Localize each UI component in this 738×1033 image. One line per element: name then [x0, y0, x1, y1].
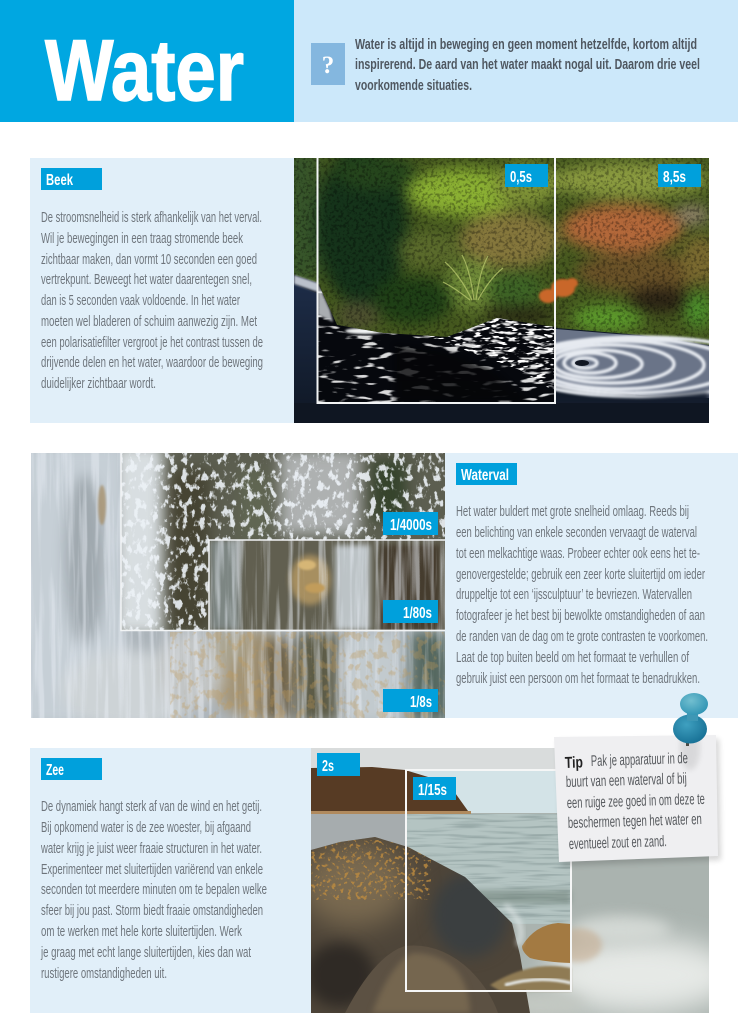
- label: 1/80s: 1/80s: [403, 605, 432, 622]
- tip text: eventueel zout en zand.: [569, 833, 667, 853]
- callout: tip note with pin: [554, 693, 721, 866]
- frame: 1/15s crop: [406, 770, 571, 991]
- frame section: 1/4000s frozen water: [115, 445, 445, 635]
- body text: Beek: moeten wel bladeren of schuim aanwezig zijn. Met: [41, 313, 258, 330]
- water: dark stream and swirl: [294, 275, 738, 423]
- photo: waterfall: [31, 453, 445, 718]
- front boulder: [345, 946, 498, 1013]
- main boulder: [311, 837, 530, 1013]
- icon: question mark: [311, 43, 345, 85]
- body text: Zee: De dynamiek hangt sterk af van de wind en het getij.: [41, 798, 262, 815]
- label: 8,5s: [658, 164, 701, 187]
- body text: Zee: rustigere omstandigheden uit.: [41, 965, 167, 982]
- label: 1/80s: [383, 600, 438, 623]
- icon: push pin: [673, 693, 708, 746]
- intro text: [355, 37, 700, 94]
- small golden rock: [570, 926, 604, 964]
- heading: Waterval: Waterval: [461, 467, 509, 484]
- hillside: [311, 767, 468, 813]
- intro text: voorkomende situaties.: [355, 78, 472, 94]
- body text: Beek: duidelijker zichtbaar wordt.: [41, 375, 156, 392]
- label: 1/8s: [383, 689, 438, 712]
- panel: Waterval text: [445, 453, 738, 718]
- photo: stream with vegetation: [294, 158, 709, 423]
- body text: Zee: om te werken met hele korte sluitertijden. Werk: [41, 923, 242, 940]
- icon: question mark: ?: [322, 52, 334, 79]
- tip text: [565, 750, 705, 853]
- label: 1/4000s: 1/4000s: [390, 517, 432, 534]
- label: 0,5s: 0,5s: [510, 169, 532, 186]
- body text: Zee: Experimenteer met sluitertijden variërend van enkele: [41, 861, 263, 878]
- heading: Beek: Beek: [46, 172, 73, 189]
- label: 1/4000s: [383, 512, 438, 535]
- header: intro panel: [294, 0, 738, 122]
- plant: orange leaves: [539, 278, 578, 303]
- body text: Beek: drijvende delen en het water, waardoor de beweging: [41, 354, 263, 371]
- label: 2s: 2s: [322, 758, 334, 775]
- body text: Beek: dan is 5 seconden vaak voldoende. In het water: [41, 292, 240, 309]
- heading: Zee: Zee: [46, 762, 64, 779]
- frame: 1/4000s crop: [121, 451, 447, 630]
- frame section: 1/80s streaked water: [209, 540, 445, 630]
- body text: Zee: seconden tot meerdere minuten om te bepalen welke: [41, 881, 267, 898]
- sky: [311, 748, 556, 770]
- body text: Zee: sfeer bij jou past. Storm biedt fraaie omstandigheden: [41, 902, 263, 919]
- label: 1/8s: 1/8s: [410, 694, 432, 711]
- frame: 0,5s crop: [318, 156, 555, 403]
- frame: 1/80s crop: [209, 540, 447, 630]
- label: 1/15s: 1/15s: [418, 782, 447, 799]
- body text: Beek: [41, 209, 263, 392]
- label: 2s: [317, 753, 360, 776]
- plant: grass tuft: [443, 255, 503, 300]
- body text: Waterval: [456, 503, 708, 687]
- header: title band: [0, 0, 294, 122]
- body text: Beek: De stroomsnelheid is sterk afhankelijk van het verval.: [41, 209, 262, 226]
- heading: Zee: [41, 758, 102, 780]
- frame section: fast shutter water: [318, 280, 555, 403]
- label: 1/15s: [413, 777, 456, 800]
- sea: [471, 813, 709, 1013]
- panel: Zee text: [30, 748, 311, 1013]
- tip text: Tip: [565, 754, 583, 772]
- heading: Waterval: [456, 463, 517, 485]
- body text: Beek: een polarisatiefilter vergroot je het contrast tussen de: [41, 334, 263, 351]
- body text: Zee: [40, 798, 267, 982]
- photo: sea with boulders: [311, 748, 709, 1013]
- body text: Zee: water krijg je juist weer fraaie structuren in het water.: [40, 840, 262, 857]
- label: 0,5s: [505, 164, 548, 187]
- title: Water: [45, 23, 244, 119]
- foam: [490, 966, 571, 991]
- label: 8,5s: 8,5s: [663, 169, 686, 186]
- heading: Beek: [41, 168, 102, 190]
- body text: Beek: vertrekpunt. Beweegt het water daarentegen snel,: [41, 271, 252, 288]
- body text: Zee: Bij opkomend water is de zee woester, bij afgaand: [41, 819, 251, 836]
- body text: Zee: je graag met echt lange sluitertijden, kies dan wat: [40, 944, 252, 961]
- body text: Beek: zichtbaar maken, dan vormt 10 seconden een goed: [41, 251, 257, 268]
- body text: Beek: Wil je bewegingen in een traag stromende beek: [41, 230, 243, 247]
- panel: Beek text: [30, 158, 294, 423]
